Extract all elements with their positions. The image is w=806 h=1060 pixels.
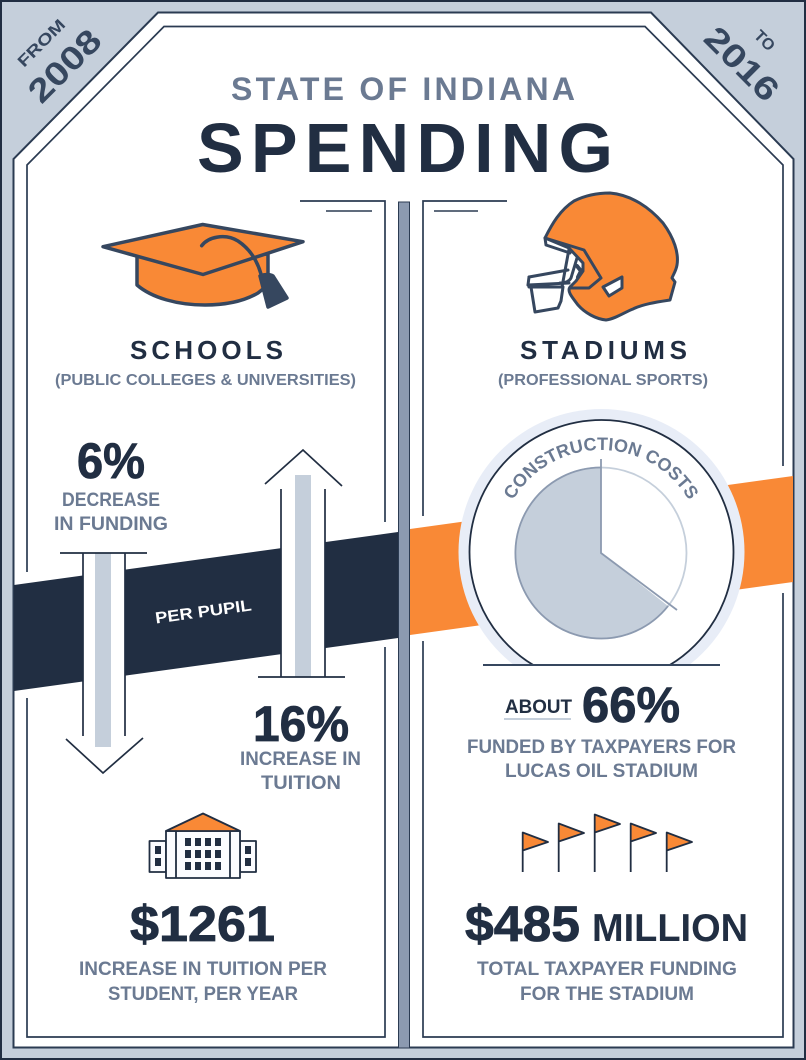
band: orange bbox=[410, 476, 793, 635]
text: funded by taxpayers: LUCAS OIL STADIUM bbox=[505, 761, 698, 782]
center divider bbox=[398, 202, 410, 1048]
stat: $1261: $1261 bbox=[130, 896, 275, 952]
stat: 16% increase in tuition: INCREASE IN bbox=[240, 749, 361, 770]
stat: $1261: STUDENT, PER YEAR bbox=[108, 984, 298, 1005]
icon: flags bbox=[523, 814, 692, 872]
heading: schools: SCHOOLS bbox=[130, 335, 283, 365]
icon: university building bbox=[150, 814, 256, 878]
stat: $485 million: FOR THE STADIUM bbox=[520, 984, 694, 1005]
heading: schools bbox=[55, 335, 356, 389]
arrow: up bbox=[258, 450, 345, 677]
arrow: down bbox=[60, 553, 147, 773]
heading: stadiums: STADIUMS bbox=[520, 335, 687, 365]
stat: about 66%: ABOUT bbox=[505, 697, 572, 718]
stat: 6% decrease in funding: 6% bbox=[77, 433, 145, 489]
corner label: from 2008: 2008 bbox=[20, 22, 109, 110]
stat: about 66% bbox=[504, 677, 680, 733]
stat: 16% increase in tuition bbox=[240, 696, 361, 794]
title: STATE OF INDIANA bbox=[231, 71, 575, 107]
title: SPENDING bbox=[197, 109, 613, 187]
chart: construction costs pie: CONSTRUCTION COSTS bbox=[504, 438, 698, 498]
stat: 6% decrease in funding bbox=[54, 433, 168, 535]
stat: $485 million: TOTAL TAXPAYER FUNDING bbox=[477, 959, 737, 980]
stat: $485 million bbox=[465, 896, 748, 1005]
icon: graduation cap bbox=[103, 224, 303, 307]
text: funded by taxpayers bbox=[467, 737, 736, 782]
stat: 16% increase in tuition: 16% bbox=[253, 696, 349, 752]
corner label: from 2008: FROM bbox=[15, 16, 69, 71]
heading: stadiums bbox=[498, 335, 708, 389]
band: per pupil: PER PUPIL bbox=[154, 597, 253, 627]
stat: 6% decrease in funding: IN FUNDING bbox=[54, 514, 168, 535]
stat: $485 million: $485 bbox=[465, 896, 580, 952]
stat: $1261: INCREASE IN TUITION PER bbox=[79, 959, 327, 980]
heading: stadiums: (PROFESSIONAL SPORTS) bbox=[498, 372, 708, 389]
band: per pupil bbox=[14, 532, 398, 691]
text: funded by taxpayers: FUNDED BY TAXPAYERS FOR bbox=[467, 737, 736, 758]
icon: football helmet bbox=[528, 193, 677, 320]
stat: about 66%: 66% bbox=[582, 677, 680, 733]
heading: schools: (PUBLIC COLLEGES & UNIVERSITIES) bbox=[55, 372, 356, 389]
stat: $485 million: MILLION bbox=[592, 907, 748, 950]
corner label: to 2016: 2016 bbox=[697, 19, 787, 109]
chart: construction costs pie bbox=[458, 409, 744, 666]
corner label: to 2016: TO bbox=[750, 27, 778, 55]
title bbox=[197, 71, 613, 187]
stat: 16% increase in tuition: TUITION bbox=[261, 773, 341, 794]
stat: $1261 bbox=[79, 896, 327, 1005]
corner label: from 2008 bbox=[15, 16, 109, 110]
stat: 6% decrease in funding: DECREASE bbox=[62, 490, 160, 511]
